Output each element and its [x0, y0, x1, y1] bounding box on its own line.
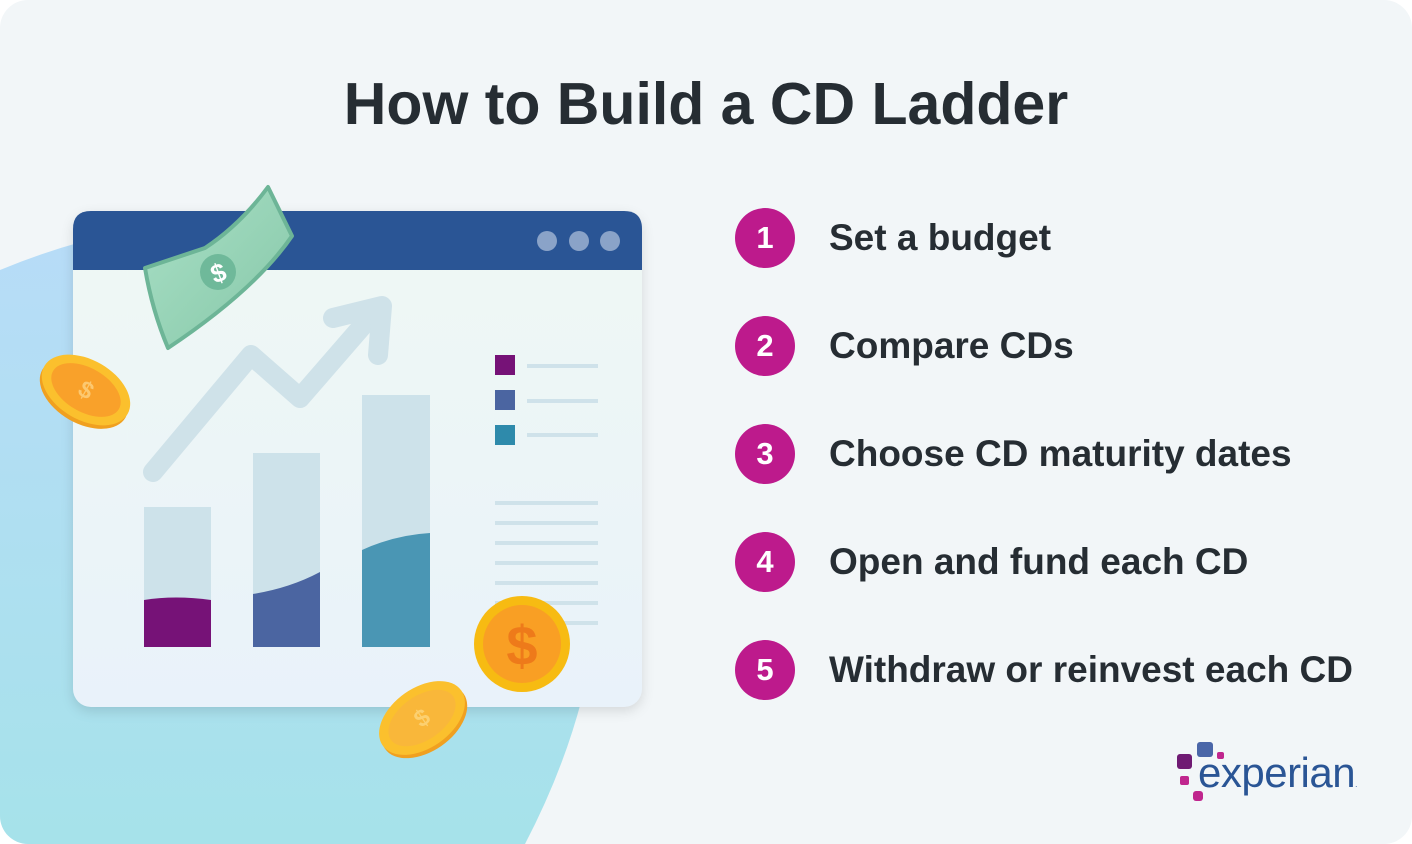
- step 2: 2: [756, 328, 774, 363]
- window: [73, 211, 642, 707]
- illustration: browser chart: [40, 184, 646, 758]
- legend: [495, 355, 598, 625]
- icon: coin right: $: [506, 614, 538, 677]
- step 4: [735, 532, 1248, 592]
- step 4: 4: [756, 544, 774, 579]
- step 2: Compare CDs: [829, 325, 1074, 366]
- step 4: Open and fund each CD: [829, 541, 1248, 582]
- icon: coin left: [27, 340, 143, 443]
- icon: coin left: $: [73, 375, 99, 406]
- step 5: 5: [756, 652, 774, 687]
- step 3: 3: [756, 436, 774, 471]
- icon: coin right: [474, 596, 570, 692]
- icon: coin bottom: $: [409, 703, 436, 733]
- icon: banknote: [145, 187, 292, 348]
- step 3: Choose CD maturity dates: [829, 433, 1292, 474]
- logo: experian: experian.: [1198, 749, 1357, 796]
- step 1: [735, 208, 1051, 268]
- step 3: [735, 424, 1292, 484]
- title: How to Build a CD Ladder: [344, 71, 1068, 137]
- trend arrow: [153, 306, 382, 472]
- icon: coin bottom: [365, 666, 481, 773]
- step 2: [735, 316, 1074, 376]
- step 1: Set a budget: [829, 217, 1051, 258]
- icon: banknote: $: [206, 256, 231, 290]
- step 5: [735, 640, 1353, 700]
- bar chart: [144, 395, 430, 647]
- step 5: Withdraw or reinvest each CD: [829, 649, 1353, 690]
- step 1: 1: [756, 220, 774, 255]
